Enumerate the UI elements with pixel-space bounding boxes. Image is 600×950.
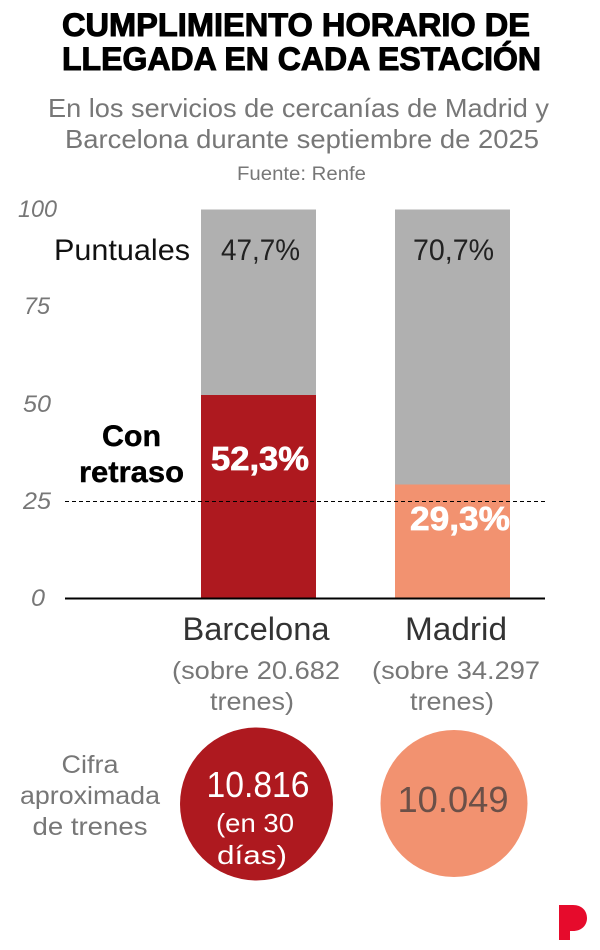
category: Madrid — [372, 611, 540, 716]
label: approximate trains: Cifra — [62, 751, 119, 779]
circle: Barcelona — [180, 728, 333, 880]
label: approximate trains — [20, 751, 160, 841]
category: Barcelona: trenes) — [210, 688, 294, 716]
category: Barcelona — [172, 611, 340, 716]
value: Madrid on time: 70,7% — [413, 234, 494, 267]
bar: Madrid on time — [395, 210, 510, 484]
y axis labels: 25 — [22, 488, 52, 515]
label: Puntuales: Puntuales — [54, 234, 190, 267]
circle: Madrid — [380, 730, 528, 877]
bar: Barcelona on time — [201, 210, 316, 396]
value: Barcelona delayed: 52,3% — [211, 440, 309, 477]
source: Fuente: Renfe — [237, 164, 366, 185]
y axis labels: 0 — [31, 585, 46, 612]
category: Madrid: (sobre 34.297 — [372, 657, 540, 685]
circle: Madrid: 10.049 — [398, 779, 508, 820]
label: Con retraso — [79, 420, 184, 489]
y axis labels — [18, 196, 58, 612]
category: Madrid: Madrid — [405, 611, 507, 647]
logo — [559, 905, 587, 940]
label: approximate trains: de trenes — [32, 813, 148, 841]
title: CUMPLIMIENTO HORARIO DE — [62, 7, 530, 43]
label: Con retraso: Con — [102, 420, 161, 453]
circle: Barcelona: días) — [217, 840, 287, 870]
subtitle — [48, 93, 549, 154]
y axis labels: 50 — [23, 391, 52, 418]
label: Con retraso: retraso — [79, 456, 184, 489]
value: Barcelona on time: 47,7% — [221, 234, 300, 267]
label: approximate trains: aproximada — [20, 782, 160, 810]
category: Barcelona: (sobre 20.682 — [172, 657, 340, 685]
subtitle: En los servicios de cercanías de Madrid y — [48, 93, 549, 123]
bar: Madrid delayed — [395, 484, 510, 598]
category: Barcelona: Barcelona — [182, 611, 330, 647]
bar: Barcelona delayed — [201, 395, 316, 598]
y axis labels: 75 — [24, 293, 51, 320]
y axis labels: 100 — [18, 196, 58, 223]
category: Madrid: trenes) — [410, 688, 494, 716]
title: LLEGADA EN CADA ESTACIÓN — [62, 41, 541, 77]
subtitle: Barcelona durante septiembre de 2025 — [65, 124, 539, 154]
circle: Barcelona: 10.816 — [206, 764, 310, 805]
value: Madrid delayed: 29,3% — [410, 500, 510, 537]
title — [62, 7, 541, 77]
circle: Barcelona: (en 30 — [216, 808, 294, 838]
